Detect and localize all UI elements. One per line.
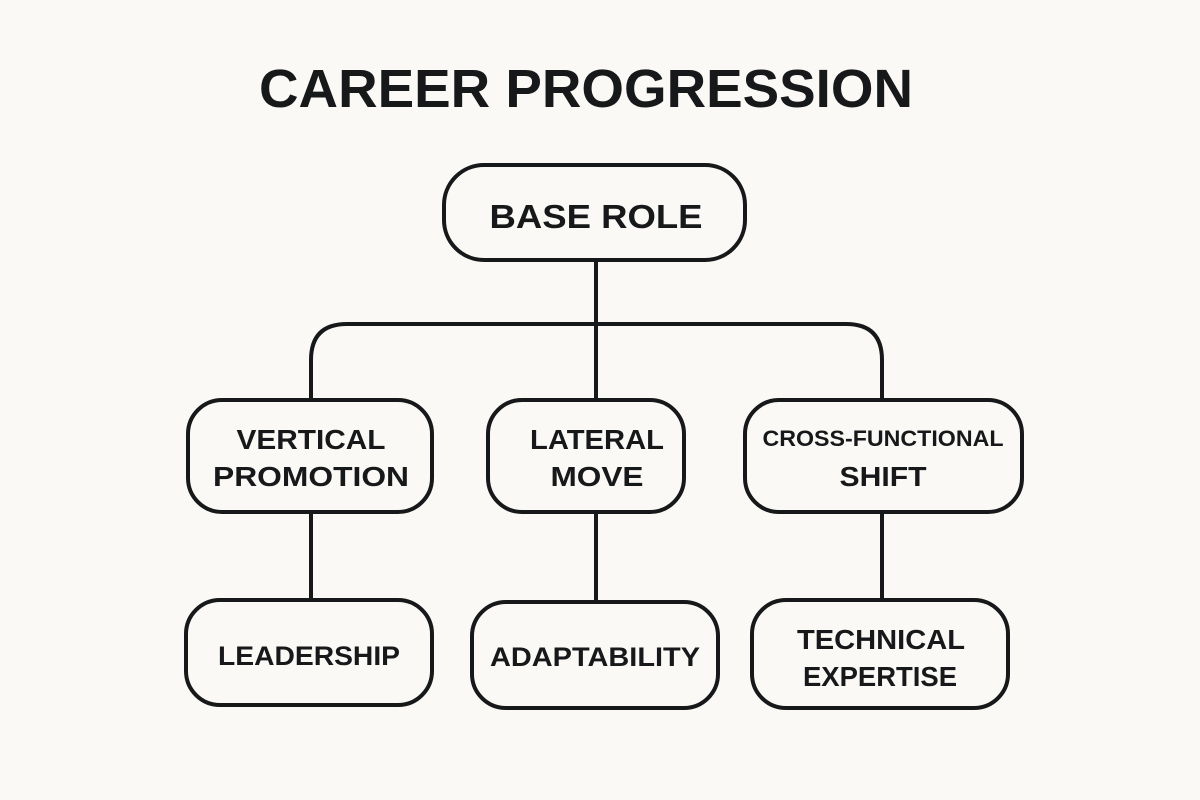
node: vertical promotion: VERTICAL [236,424,386,455]
node: leadership: LEADERSHIP [218,641,400,671]
node: lateral move [488,400,684,512]
node: adaptability [472,602,718,708]
node: cross-functional shift [745,400,1022,512]
title: CAREER PROGRESSION [259,59,913,119]
node: adaptability: ADAPTABILITY [490,642,700,672]
node: technical expertise: TECHNICAL [797,624,965,655]
node: base role: BASE ROLE [490,198,702,235]
node: lateral move: LATERAL [530,424,664,455]
node: technical expertise: EXPERTISE [803,661,957,692]
node: cross-functional shift: CROSS-FUNCTIONAL [762,426,1004,451]
node: lateral move: MOVE [550,461,644,492]
node: leadership [186,600,432,705]
node: vertical promotion [188,400,432,512]
node: cross-functional shift: SHIFT [840,461,926,492]
node: base role [444,165,745,260]
node: vertical promotion: PROMOTION [213,461,409,492]
node: technical expertise [752,600,1008,708]
connector lines [311,260,882,602]
